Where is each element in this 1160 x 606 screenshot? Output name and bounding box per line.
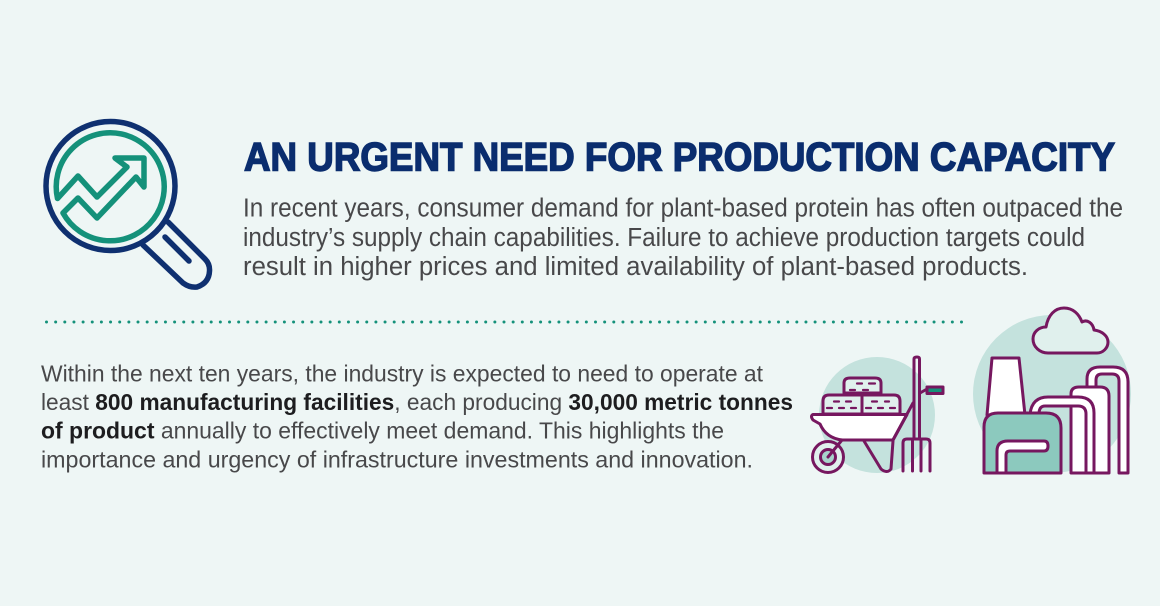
body text block (41, 360, 793, 472)
cloud (1033, 308, 1108, 353)
barrow wheel and frame (812, 442, 844, 472)
back pipe (1087, 367, 1128, 473)
body text block: Within the next ten years, the industry is expected to need to operate at (41, 360, 764, 386)
icon: factory and cloud (973, 308, 1131, 473)
dotted divider (46, 320, 962, 324)
front pipe (1030, 397, 1094, 473)
intro text block: result in higher prices and limited availability of plant-based products. (243, 253, 1028, 281)
icon: wheelbarrow and pitchfork (812, 357, 943, 473)
intro text block: industry’s supply chain capabilities. Failure to achieve production targets could (243, 224, 1085, 252)
body text block: importance and urgency of infrastructure investments and innovation. (41, 446, 753, 472)
factory building (984, 413, 1061, 473)
barrow tray (812, 414, 907, 440)
column (1071, 387, 1109, 473)
body text block: of product annually to effectively meet demand. This highlights the (41, 418, 724, 444)
body text block: least 800 manufacturing facilities, each producing 30,000 metric tonnes (41, 389, 793, 415)
building pipe (997, 441, 1048, 473)
barrow load: bales (823, 378, 900, 414)
smokestack (987, 358, 1025, 415)
pitchfork (903, 357, 930, 471)
intro text block: In recent years, consumer demand for plant-based protein has often outpaced the (243, 194, 1123, 222)
intro text block (243, 194, 1123, 281)
icon: magnifying glass with rising arrow (46, 122, 210, 287)
